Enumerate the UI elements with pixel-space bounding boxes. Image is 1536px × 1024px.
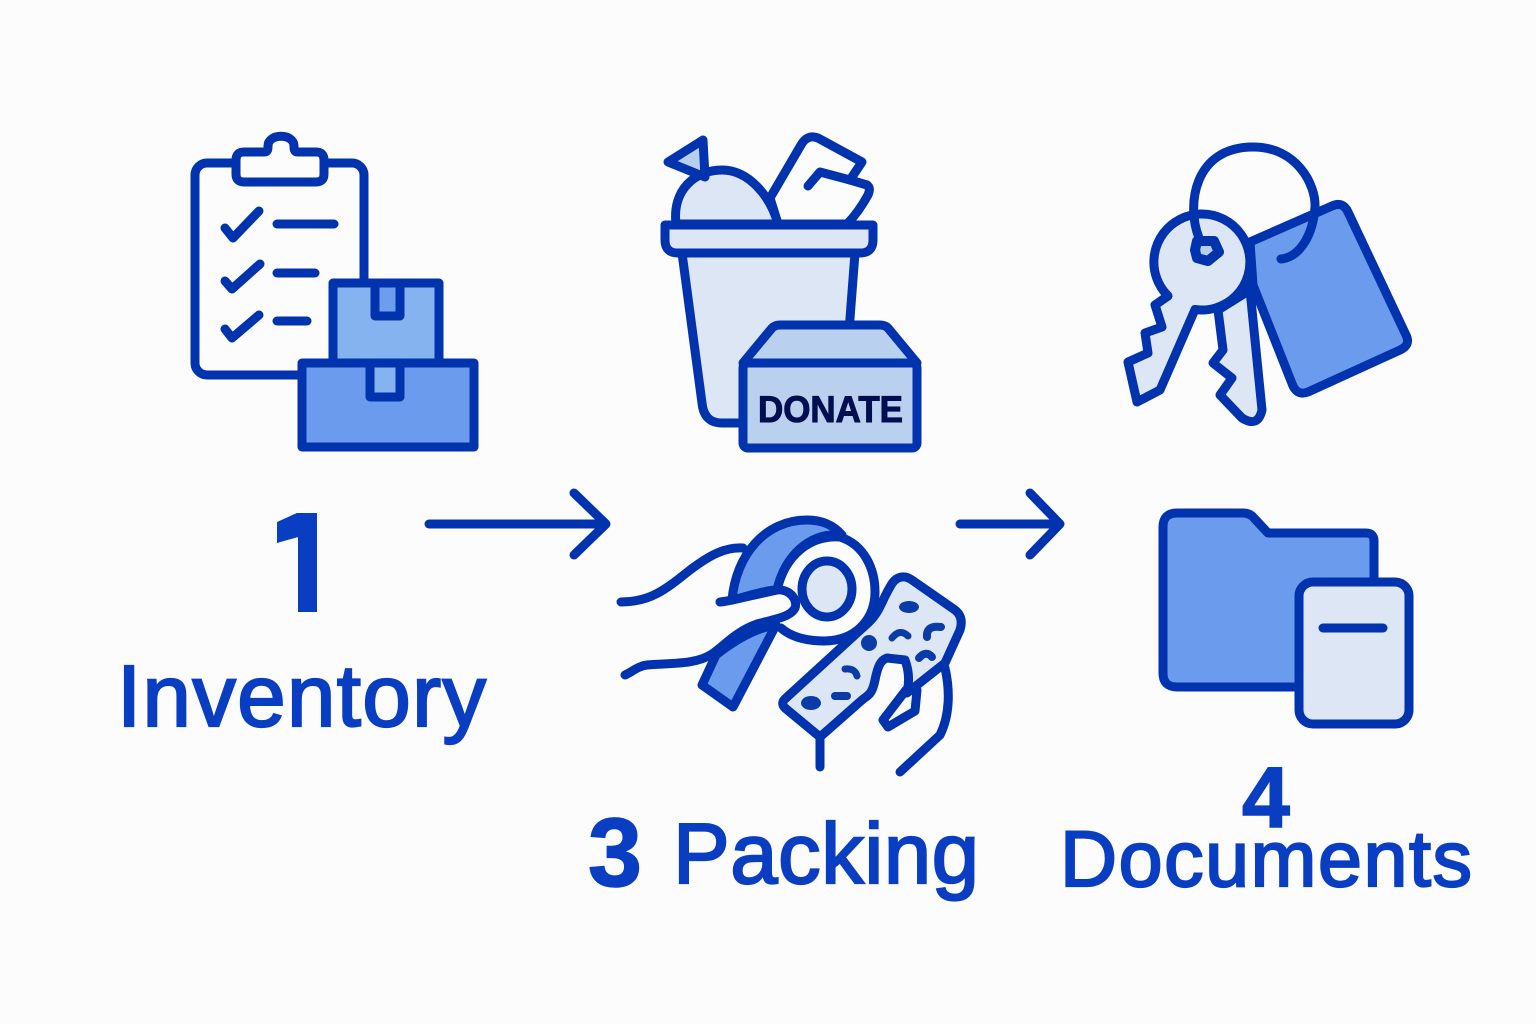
right fingers <box>883 690 917 727</box>
icon: donation bucket <box>665 137 917 448</box>
document <box>1299 582 1409 724</box>
bucket body <box>682 253 855 423</box>
upper box <box>333 283 439 365</box>
clipboard clip <box>236 136 324 182</box>
checklist <box>225 211 334 338</box>
foam stem <box>816 737 824 767</box>
donate box <box>743 325 917 448</box>
label: Inventory: Inventory <box>117 648 486 745</box>
icon: folder with document <box>1163 513 1409 724</box>
paper fold <box>808 172 850 186</box>
donate label: DONATE <box>758 389 903 430</box>
tape strip upper <box>732 520 842 600</box>
label: Packing: Packing <box>673 807 979 902</box>
number 3: 3 <box>588 798 642 907</box>
contents: bag <box>676 170 778 224</box>
lower box <box>302 363 474 447</box>
tape strip lower <box>702 625 776 707</box>
arrow: inventory to packing <box>429 493 606 555</box>
label: Documents: Documents <box>1060 814 1472 903</box>
number 1: 1 <box>259 484 338 643</box>
key ring <box>1194 147 1315 259</box>
key tag <box>1250 204 1408 393</box>
document line <box>1323 624 1383 632</box>
tape roll <box>777 537 875 641</box>
key hole <box>1195 241 1219 261</box>
contents: bag tie <box>668 140 705 177</box>
icon: keys <box>1128 147 1408 422</box>
left hand <box>621 548 743 602</box>
contents: paper <box>770 137 869 224</box>
foam sheet <box>783 577 961 737</box>
icon: packing tape in hands <box>621 520 961 772</box>
number 4: 4 <box>1242 750 1290 846</box>
arrow: packing to documents <box>960 493 1060 555</box>
bucket rim <box>665 225 873 253</box>
tape centre <box>802 561 852 617</box>
icon: clipboard with boxes <box>195 136 474 447</box>
folder <box>1163 513 1374 687</box>
back key <box>1213 290 1262 422</box>
clipboard board <box>195 163 364 375</box>
front key <box>1128 214 1250 402</box>
foam spots <box>801 601 941 710</box>
